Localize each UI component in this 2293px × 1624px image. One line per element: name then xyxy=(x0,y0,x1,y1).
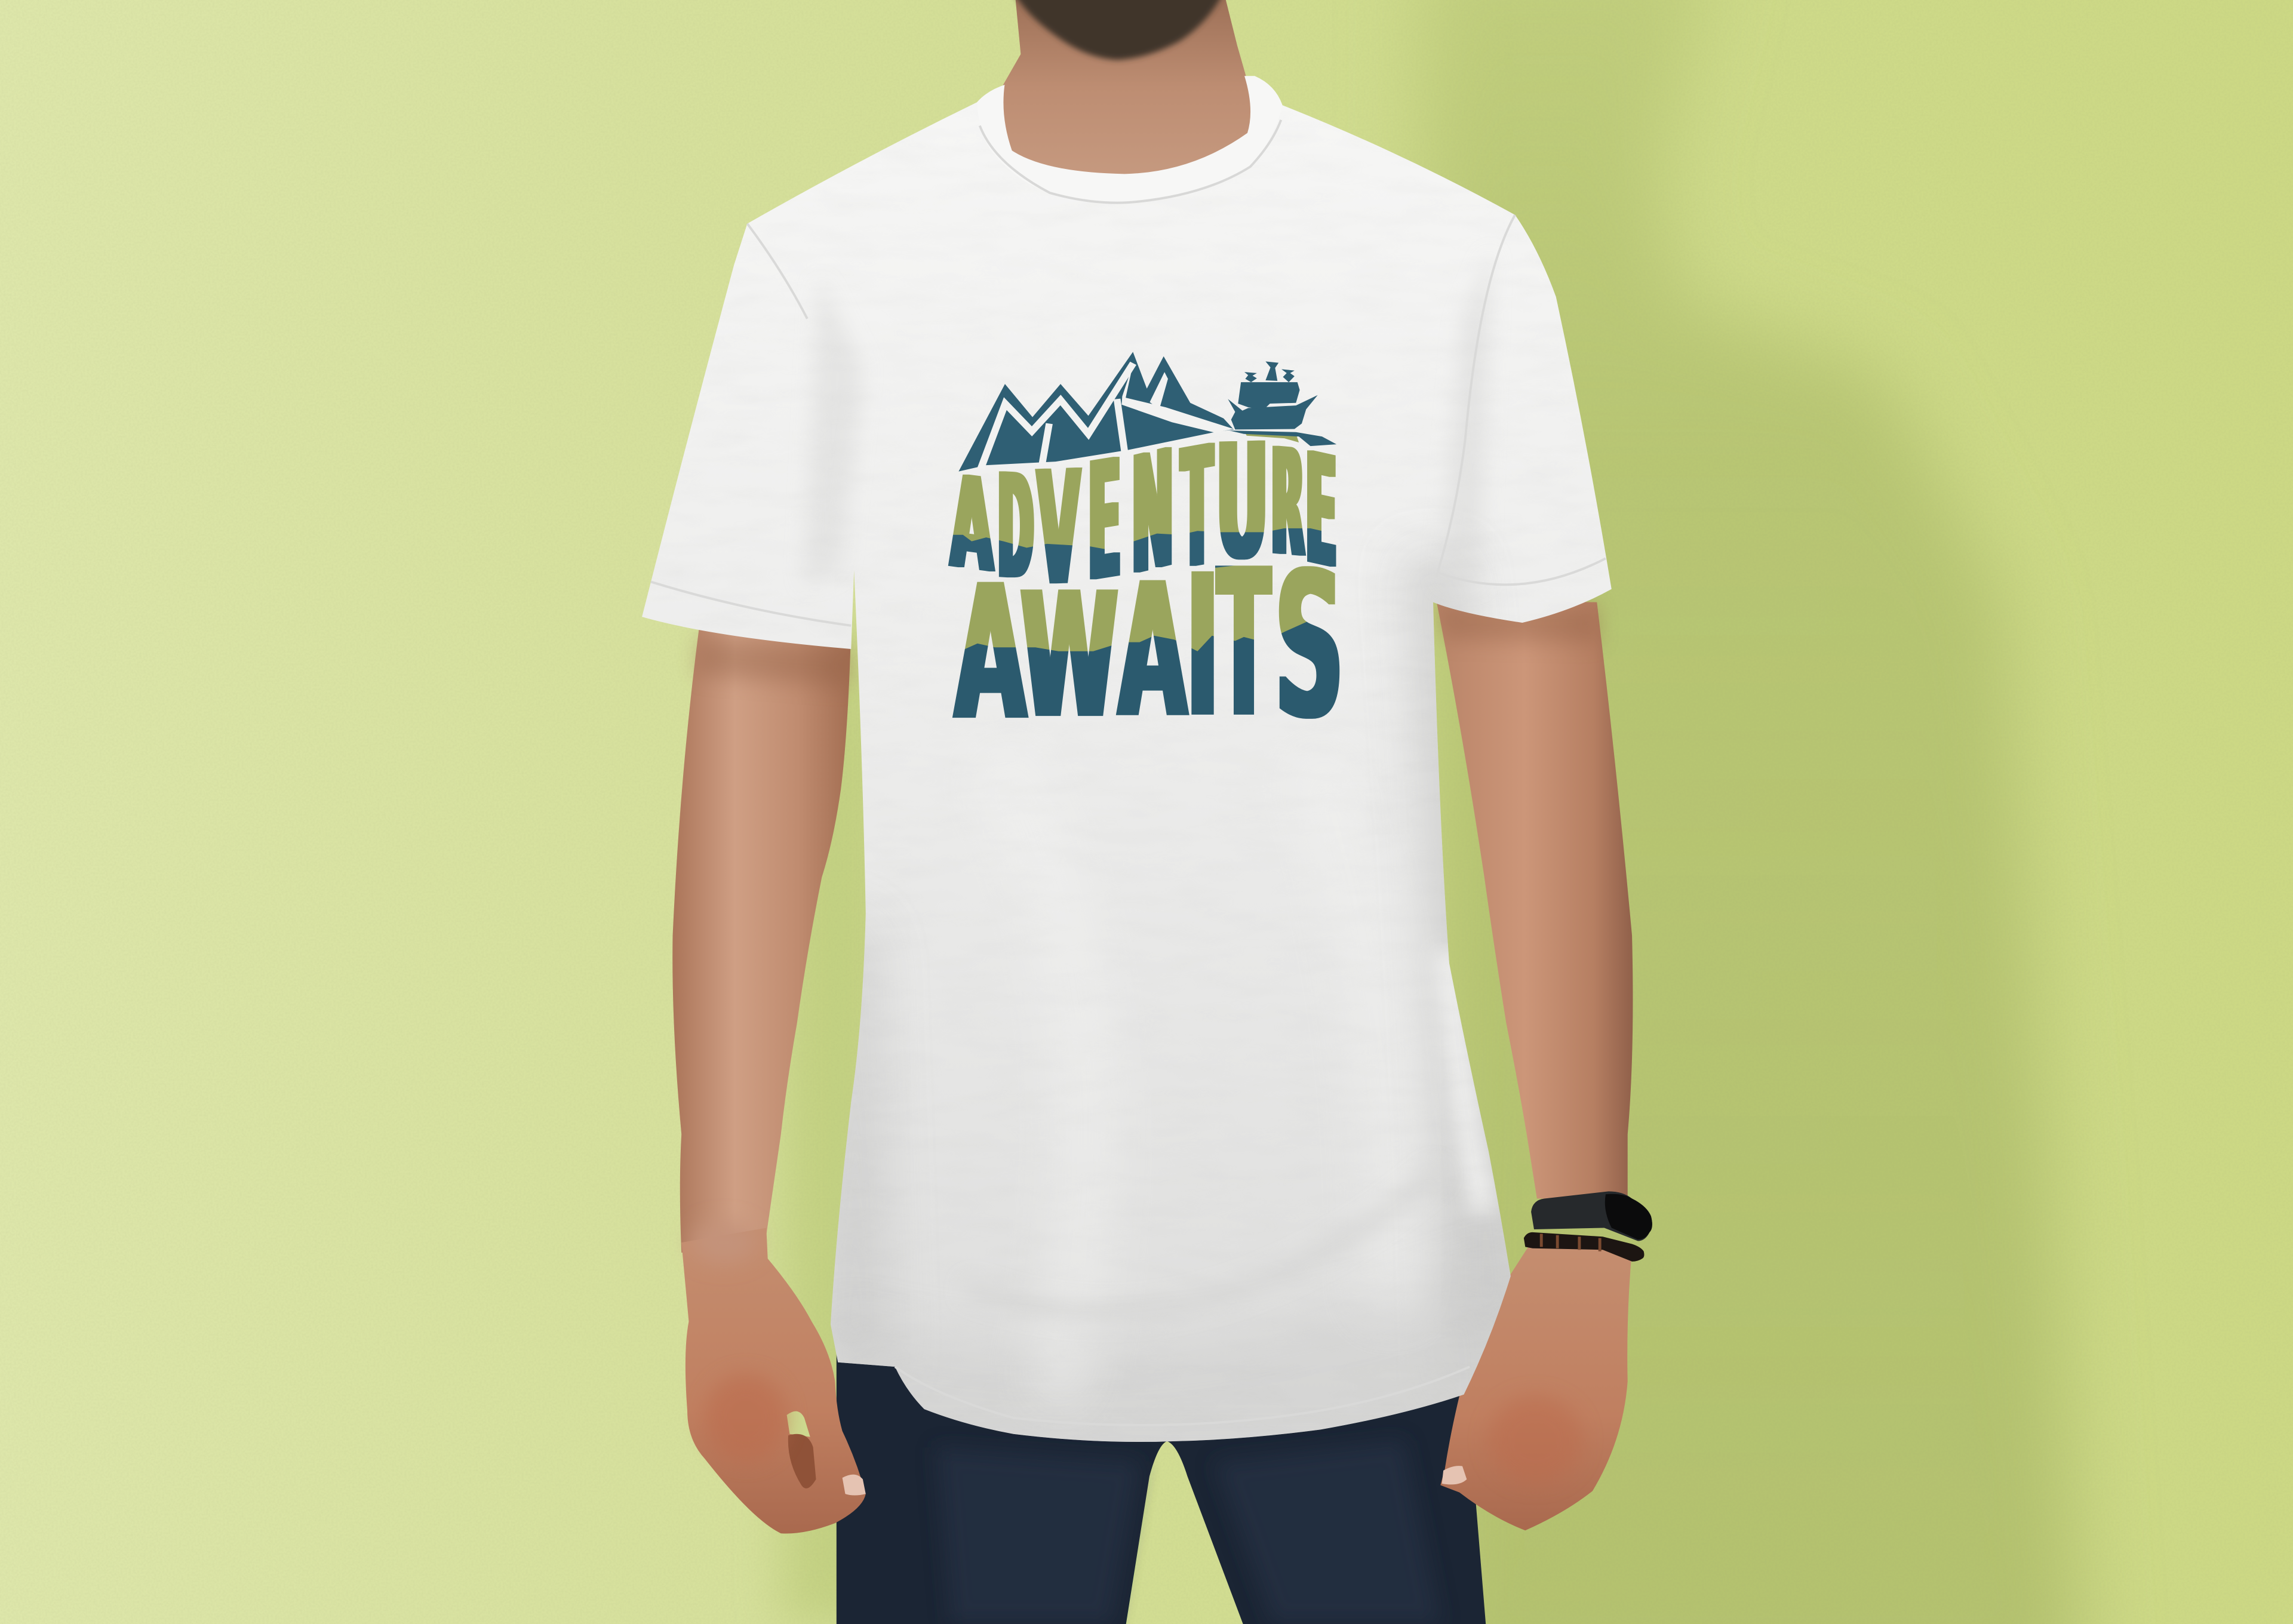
beard xyxy=(1012,0,1225,60)
left arm and hand xyxy=(672,629,866,1533)
curled fingers xyxy=(788,1434,816,1488)
hand redness xyxy=(1489,1396,1582,1484)
sleeve shadow on arm xyxy=(1436,602,1600,643)
printed logo: Adventure Awaits xyxy=(920,352,1373,740)
hand redness xyxy=(705,1374,787,1462)
lettering xyxy=(920,433,1373,740)
sleeve shadow on arm xyxy=(696,637,851,687)
collar seam xyxy=(980,120,1281,203)
man xyxy=(629,0,1652,1624)
wall gap inside fingers xyxy=(787,1411,810,1437)
t-shirt xyxy=(629,0,1638,1462)
mountains xyxy=(958,352,1234,472)
ship waves xyxy=(1230,430,1336,446)
jeans xyxy=(837,1352,1486,1624)
thumbnail xyxy=(1442,1466,1467,1484)
beads xyxy=(1524,1232,1644,1262)
fitness band xyxy=(1531,1191,1652,1241)
shirt body and sleeves xyxy=(642,102,1612,1442)
neck xyxy=(994,0,1264,182)
sleeve seams and stitching xyxy=(651,215,1606,1425)
right arm and hand xyxy=(1436,599,1633,1530)
ship xyxy=(1228,361,1318,429)
wrist blend xyxy=(691,1222,756,1263)
shirt shading and wrinkles xyxy=(629,73,1638,1462)
thumbnail xyxy=(843,1475,866,1496)
collar xyxy=(977,76,1283,201)
wall shading between left arm and body xyxy=(782,629,892,1624)
watch band and beaded bracelet xyxy=(1524,1191,1652,1262)
wall shadow cast by the man xyxy=(1419,0,2084,1624)
